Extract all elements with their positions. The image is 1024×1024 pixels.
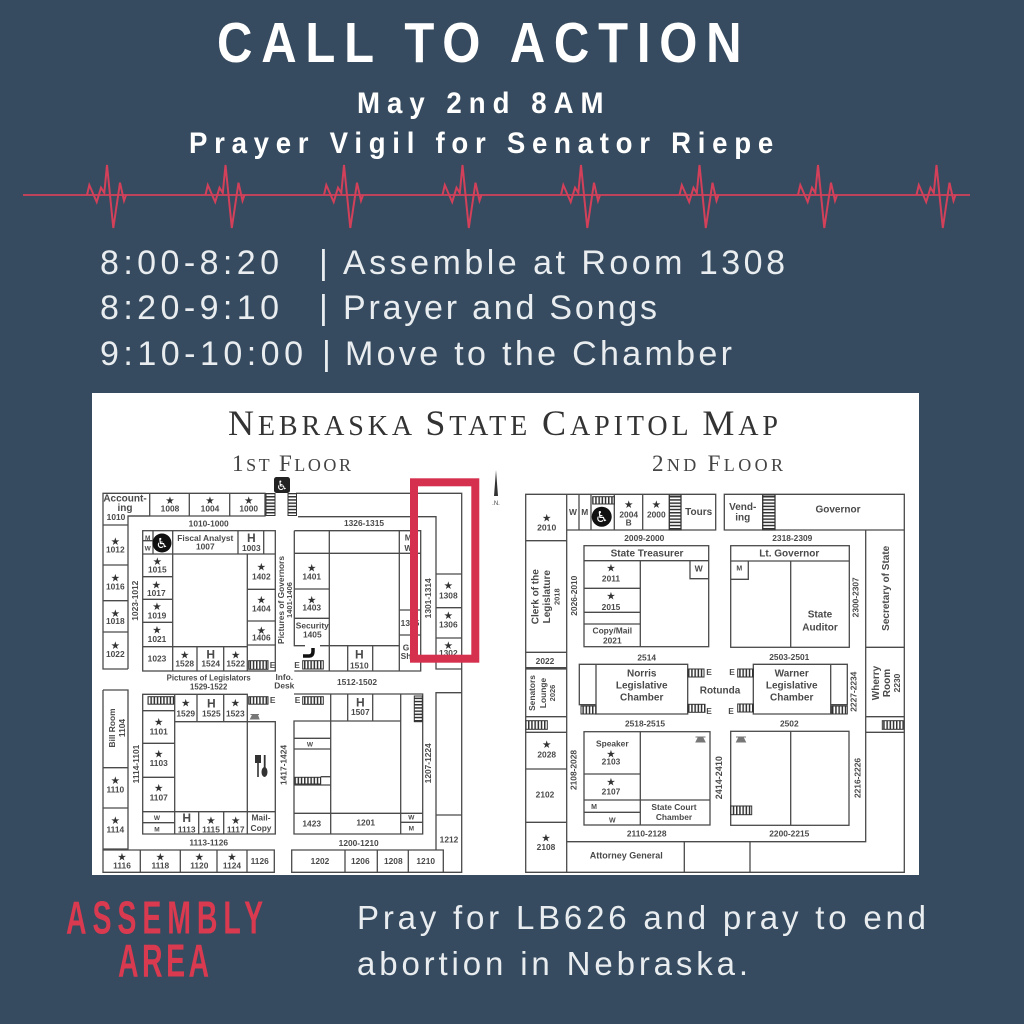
first floor labels: 1113 (178, 825, 196, 835)
second floor labels: Copy/Mail (593, 625, 632, 635)
first floor plan (103, 477, 462, 872)
second floor labels: State Court (651, 802, 697, 812)
first floor labels: 1301-1314 (423, 578, 433, 618)
first floor labels: ★ (154, 748, 163, 760)
icon: wheelchair second floor (592, 507, 612, 527)
first floor labels: ★ (231, 698, 240, 710)
heartbeat line (23, 165, 970, 228)
first floor labels: 1010 (107, 512, 126, 522)
second floor labels: 2004 (619, 509, 638, 519)
first floor labels: 1529 (176, 709, 195, 719)
first floor labels: ★ (195, 852, 204, 864)
subtitle: date and event: May 2nd 8AM (357, 87, 604, 120)
second floor labels: 2021 (603, 635, 622, 645)
second floor labels: E (729, 667, 735, 677)
second floor labels: Chamber (770, 693, 813, 704)
first floor labels: Fiscal Analyst (177, 533, 234, 543)
second floor labels: W (609, 817, 616, 824)
first floor labels: 1104 (117, 719, 127, 737)
first floor labels: 1113-1126 (189, 838, 228, 848)
first floor labels: H (247, 531, 256, 545)
first floor labels: Desk (274, 680, 295, 690)
first floor labels: 1405 (303, 630, 322, 640)
second floor labels: 2414-2410 (714, 756, 724, 799)
first floor labels: Info. (275, 672, 293, 682)
first floor labels: E (295, 695, 301, 705)
second floor labels: State Treasurer (611, 549, 684, 560)
second floor labels: ★ (606, 777, 616, 789)
first floor labels: 1021 (148, 634, 167, 644)
first floor labels: ★ (257, 562, 266, 574)
first floor labels: 1510 (350, 660, 369, 670)
first floor labels: 1423 (302, 819, 321, 829)
first floor labels: 1529-1522 (190, 682, 228, 691)
second floor labels: E (706, 706, 712, 716)
first floor labels: ★ (206, 815, 216, 827)
second floor labels: ★ (542, 739, 551, 751)
second floor labels: 2502 (780, 719, 799, 729)
second floor labels: 2009-2000 (624, 533, 665, 543)
second floor labels: ★ (542, 512, 551, 524)
second floor walls (526, 494, 904, 872)
second floor labels: Room (882, 669, 893, 697)
first floor labels: W (154, 815, 161, 822)
second floor labels: Tours (685, 507, 713, 518)
first floor labels: 1306 (439, 620, 458, 630)
first floor labels: E (294, 660, 300, 670)
schedule: 8:20-9:10 (100, 289, 279, 327)
second floor labels: 2102 (536, 790, 555, 800)
first floor labels: Security (296, 620, 329, 630)
second floor labels: 2318-2309 (772, 533, 813, 543)
second floor labels: 2108-2028 (568, 750, 578, 790)
schedule: 9:10-10:00 (100, 335, 303, 373)
first floor labels: 1103 (150, 758, 168, 768)
first floor labels: 1308 (439, 590, 458, 600)
first floor labels: 1212 (440, 834, 459, 844)
first floor labels: 1522 (226, 659, 245, 669)
first floor labels: ★ (181, 698, 190, 710)
first floor labels: ★ (111, 815, 120, 827)
first floor labels: 1200-1210 (339, 838, 379, 848)
first floor labels: 1022 (106, 649, 125, 659)
first floor labels: 1202 (311, 856, 330, 866)
first floor labels: 1015 (148, 564, 167, 574)
second floor labels: Lounge (538, 678, 548, 708)
first floor labels: ★ (165, 495, 175, 507)
first floor labels: 1000 (239, 504, 258, 514)
icon: wheelchair entrance: ♿ (276, 479, 288, 494)
first floor labels: ing (118, 503, 132, 514)
icon: wheelchair entrance (274, 477, 290, 494)
first floor labels: G (403, 643, 409, 653)
second floor labels: Clerk of the (530, 569, 542, 624)
first floor labels: 1403 (302, 603, 321, 613)
first floor labels: 1117 (227, 825, 245, 835)
first floor labels: ★ (244, 495, 253, 507)
subtitle: date and event (189, 87, 773, 160)
second floor labels (527, 499, 902, 860)
first floor heading: 1ST FLOOR (232, 451, 351, 476)
first floor walls (103, 493, 462, 872)
first floor labels: 1302 (439, 648, 458, 658)
second floor labels: M (736, 566, 742, 573)
schedule: Assemble at Room 1308 (343, 244, 785, 282)
assembly area label: ASSEMBLY (66, 893, 263, 944)
second floor labels: Chamber (620, 693, 663, 704)
second floor labels: 2503-2501 (769, 652, 810, 662)
second floor labels: ing (735, 513, 750, 524)
map title: NEBRASKA STATE CAPITOL MAP (228, 403, 778, 443)
first floor labels: Mail- (251, 813, 271, 823)
first floor labels: 1023-1012 (130, 580, 140, 621)
second floor labels: Warner (775, 669, 809, 680)
first floor labels: 1107 (150, 793, 168, 803)
second floor labels: Legislative (616, 680, 668, 691)
second floor labels: 2018 (552, 588, 562, 605)
first floor labels: ★ (153, 556, 162, 568)
first floor labels: ★ (444, 610, 453, 622)
first floor labels: Copy (251, 823, 272, 833)
first floor labels: 1210 (416, 856, 435, 866)
red highlight box (414, 482, 475, 659)
first floor labels: Sh (401, 651, 411, 661)
first floor labels: H (356, 696, 365, 710)
first floor labels: ★ (154, 782, 163, 794)
first floor labels: ★ (444, 580, 453, 592)
second floor labels: Legislature (542, 570, 553, 623)
assembly area label (66, 893, 263, 987)
north arrow (492, 470, 500, 507)
first floor labels: ★ (111, 573, 120, 585)
first floor labels: 1206 (351, 856, 370, 866)
second floor heading: 2ND FLOOR (652, 451, 783, 476)
second floor labels: ★ (606, 748, 616, 760)
north arrow: .N. (492, 501, 500, 507)
first floor labels: ★ (231, 649, 240, 661)
second floor labels: 2518-2515 (625, 719, 665, 729)
second floor labels: Lt. Governor (759, 549, 819, 560)
first floor labels: 1401 (302, 571, 321, 581)
first floor labels: ★ (111, 640, 120, 652)
capitol map panel (92, 393, 919, 875)
first floor stairs (148, 494, 422, 784)
icon: wheelchair second floor: ♿ (595, 508, 608, 526)
second floor labels: 2010 (537, 523, 556, 533)
first floor labels: ★ (154, 717, 163, 729)
first floor labels: ★ (111, 775, 120, 787)
first floor labels: 1114 (106, 824, 124, 834)
assembly area label: AREA (118, 936, 209, 987)
first floor labels: 1207-1224 (423, 743, 433, 783)
second floor labels: W (569, 507, 577, 517)
subtitle: date and event: Prayer Vigil for Senator Riepe (189, 127, 773, 160)
first floor labels: 1114-1101 (131, 744, 141, 783)
second floor labels: 2230 (892, 673, 902, 692)
first floor labels: 1012 (106, 544, 125, 554)
first floor labels: W (404, 543, 412, 553)
schedule: Prayer and Songs (343, 289, 657, 327)
second floor stairs (526, 495, 903, 815)
second floor labels: 2200-2215 (769, 829, 810, 839)
first floor labels: ★ (307, 594, 316, 606)
second floor plan (526, 494, 904, 872)
first floor labels: 1018 (106, 616, 125, 626)
schedule: | (319, 289, 328, 327)
second floor labels: Auditor (802, 623, 838, 634)
first floor labels: 1406 (252, 633, 271, 643)
second floor labels: 2022 (536, 656, 555, 666)
first floor labels: 1003 (242, 543, 261, 553)
first floor labels: 1305 (401, 618, 420, 628)
second floor labels: Governor (815, 505, 861, 516)
second floor labels: Attorney General (590, 850, 663, 860)
first floor labels: Pictures of Legislators (167, 674, 251, 683)
second floor labels: 2026-2010 (569, 575, 579, 616)
second floor labels: Norris (627, 669, 657, 680)
second floor labels: ★ (606, 591, 616, 603)
first floor labels: E (270, 660, 276, 670)
first floor labels: 1019 (148, 610, 167, 620)
first floor labels: ★ (152, 601, 162, 613)
first floor labels: 1118 (151, 860, 169, 870)
first floor labels: 1126 (251, 856, 269, 866)
first floor labels: Account- (103, 494, 147, 505)
first floor labels: 1023 (148, 654, 167, 664)
first floor labels: H (207, 697, 216, 711)
first floor labels: M (405, 533, 412, 543)
first floor labels: ★ (231, 815, 240, 827)
first floor labels: 1201 (356, 818, 375, 828)
first floor labels: 1401-1406 (285, 582, 294, 618)
first floor labels: E (270, 695, 276, 705)
second floor labels: 2000 (647, 509, 666, 519)
prayer call text: abortion in Nebraska. (357, 945, 748, 982)
first floor labels: W (145, 546, 152, 552)
first floor labels: H (355, 647, 364, 661)
icon: curved arrow (303, 648, 313, 656)
first floor labels: 1124 (223, 860, 241, 870)
second floor labels: 2026 (548, 685, 557, 701)
first floor labels: ★ (152, 579, 161, 591)
icon: wheelchair fiscal: ♿ (156, 536, 168, 552)
schedule: | (322, 335, 331, 373)
second floor labels: Wherry (871, 665, 882, 700)
second floor labels: Legislative (766, 680, 818, 691)
first floor labels: ★ (257, 594, 266, 606)
first floor labels: 1120 (190, 860, 209, 870)
first floor labels: 1417-1424 (278, 745, 288, 785)
second floor labels: Rotunda (700, 685, 741, 696)
second floor labels: E (706, 667, 712, 677)
second floor labels: Speaker (596, 739, 629, 749)
second floor labels: 2103 (602, 757, 621, 767)
second floor labels: 2514 (637, 652, 656, 662)
first floor labels: 1507 (351, 707, 370, 717)
second floor labels: 2108 (537, 842, 556, 852)
second floor labels: 2107 (602, 786, 621, 796)
second floor labels: W (695, 564, 704, 574)
second floor labels: 2227-2234 (848, 671, 858, 712)
first floor labels: 1208 (384, 856, 403, 866)
second floor labels: Secretary of State (881, 545, 892, 631)
first floor labels: 1007 (196, 542, 215, 552)
second floor labels: ★ (606, 562, 616, 574)
first floor labels: 1008 (161, 504, 180, 514)
first floor labels: M (409, 825, 414, 832)
second floor labels: B (626, 517, 632, 527)
first floor labels: 1101 (150, 726, 168, 736)
second floor labels: M (581, 507, 588, 517)
second floor labels: ★ (624, 499, 633, 511)
first floor labels: 1528 (175, 659, 194, 669)
first floor labels: W (408, 815, 415, 822)
first floor labels: ★ (152, 624, 162, 636)
second floor labels: E (728, 706, 734, 716)
first floor labels: ★ (257, 625, 266, 637)
title: CALL TO ACTION (217, 12, 742, 75)
first floor labels: 1010-1000 (189, 519, 229, 529)
first floor labels: H (206, 647, 215, 661)
first floor labels: 1326-1315 (344, 518, 384, 528)
second floor labels: 2110-2128 (627, 829, 667, 839)
first floor labels: ★ (156, 852, 165, 864)
first floor labels: 1004 (201, 504, 220, 514)
second floor labels: M (591, 804, 597, 811)
second floor labels: Senators (527, 675, 537, 711)
first floor labels: 1525 (202, 709, 221, 719)
first floor labels: 1512-1502 (337, 677, 377, 687)
first floor labels: 1016 (106, 581, 125, 591)
icon: fork and knife (255, 755, 268, 777)
first floor labels: 1402 (252, 571, 271, 581)
second floor labels: Vend- (729, 502, 756, 513)
first floor labels: ★ (444, 640, 453, 652)
first floor labels: ★ (111, 608, 120, 620)
first floor labels: 1404 (252, 604, 271, 614)
first floor labels: 1110 (106, 785, 124, 795)
second floor labels: 2216-2226 (853, 758, 863, 798)
first floor labels: ★ (227, 852, 237, 864)
first floor labels: ★ (205, 495, 215, 507)
first floor labels: 1116 (113, 860, 131, 870)
schedule: | (319, 244, 328, 282)
first floor labels: 1524 (201, 659, 220, 669)
first floor labels: ★ (307, 563, 316, 575)
schedule: 8:00-8:20 (100, 244, 279, 282)
second floor labels: Chamber (656, 812, 693, 822)
second floor labels: State (808, 609, 833, 620)
first floor labels: M (145, 535, 150, 542)
second floor labels: 2028 (537, 749, 556, 759)
icon: wheelchair fiscal (152, 534, 172, 552)
prayer call text: Pray for LB626 and pray to end (357, 899, 926, 936)
first floor labels: Bill Room (107, 708, 117, 748)
second floor labels: 2011 (602, 574, 620, 584)
prayer call text (357, 899, 926, 982)
second floor labels: ★ (541, 832, 551, 844)
icon: phones (696, 737, 746, 742)
first floor labels (103, 494, 459, 870)
first floor labels: H (182, 811, 191, 825)
first floor labels: 1115 (202, 825, 220, 835)
icon: phone (250, 714, 259, 719)
first floor labels: ★ (111, 536, 120, 548)
first floor labels: ★ (117, 852, 127, 864)
schedule (100, 244, 785, 373)
schedule: Move to the Chamber (345, 335, 732, 373)
second floor labels: 2300-2307 (851, 577, 861, 617)
first floor labels: M (154, 826, 160, 833)
second floor labels: ★ (652, 499, 661, 511)
first floor labels: Pictures of Governors (276, 556, 286, 644)
second floor labels: 2015 (602, 602, 621, 612)
first floor labels: ★ (180, 649, 189, 661)
first floor labels: 1523 (226, 709, 245, 719)
first floor labels: 1017 (147, 588, 166, 598)
first floor labels: W (307, 742, 314, 749)
